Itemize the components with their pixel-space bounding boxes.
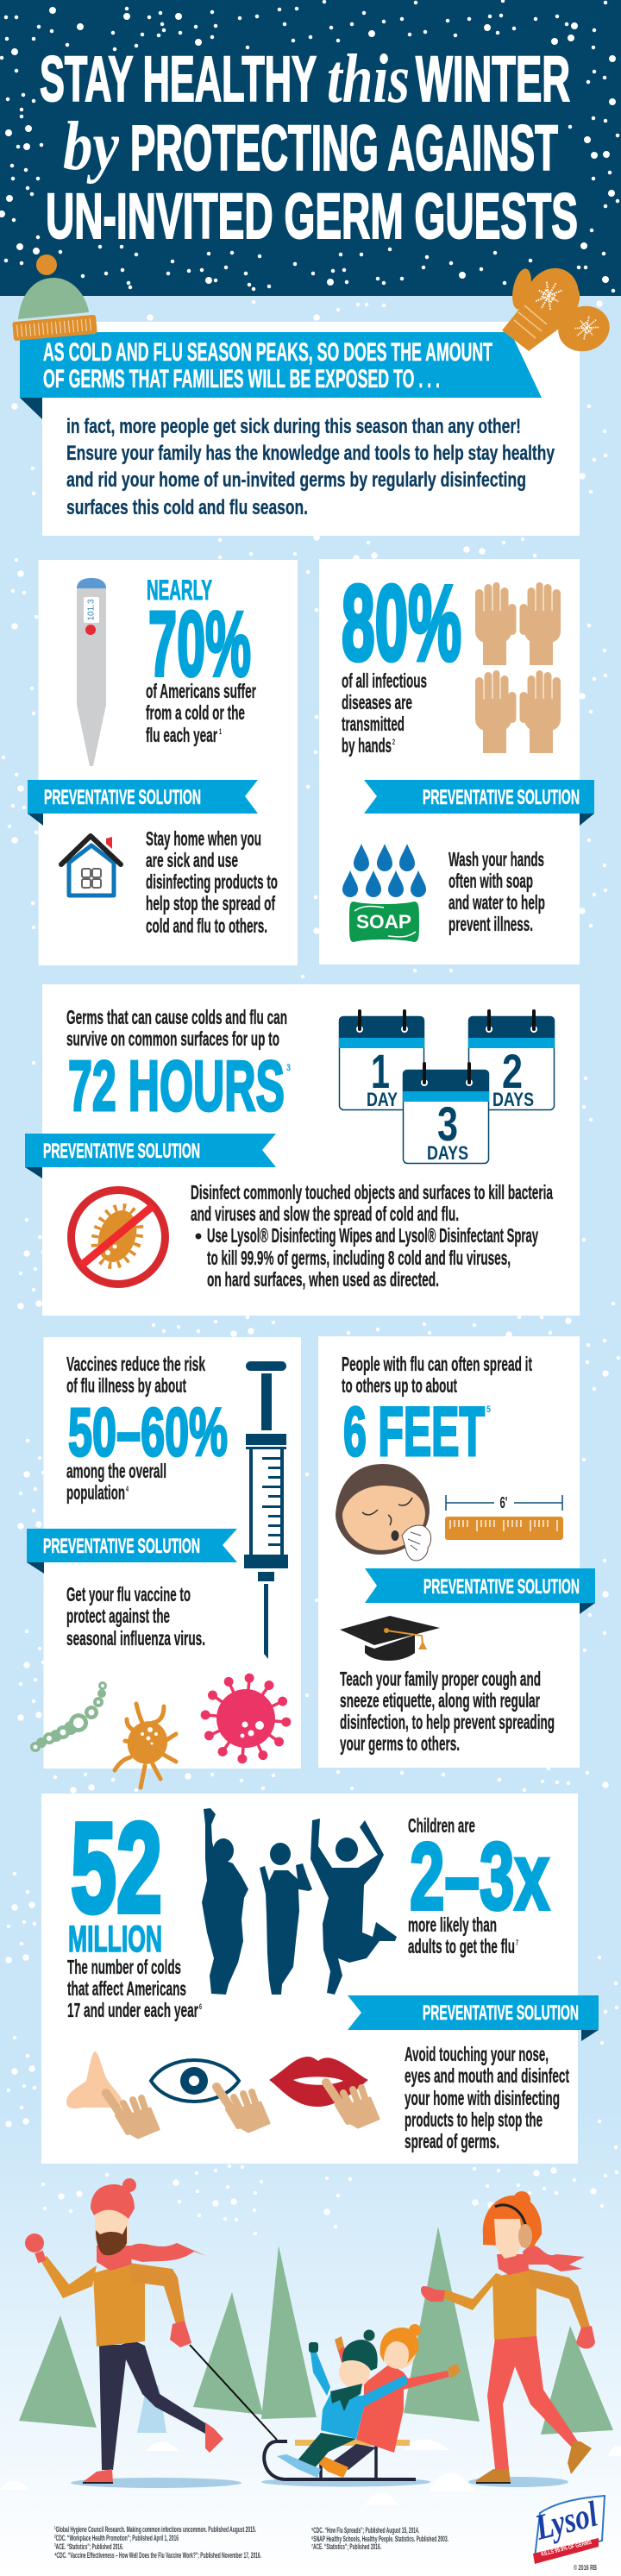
footnotes right: ⁷ACE. “Statistics”; Published 2016. [311,2542,381,2552]
snow on light background [3,302,618,2234]
icon: lips and hand [269,2057,379,2127]
stat: 2-3x [408,1814,549,1957]
footnotes left: ⁴CDC. “Vaccine Effectiveness – How Well Does the Flu Vaccine Work?”; Published November 17, 2016. [54,2551,261,2560]
banner: intro [20,332,542,419]
solution text [191,1181,553,1291]
illustration: sled with children [264,2324,461,2479]
stat: 2-3x: 2–3x [410,1824,549,1930]
icon: pink virus [200,1673,292,1764]
stat: nearly 70 percent: 1 [219,727,222,736]
snow mounds and shadows [0,2440,621,2505]
icon: water drops and soap: SOAP [356,911,411,933]
stat: 80 percent: 2 [392,738,395,746]
icon: six foot ruler [445,1494,563,1540]
solution text: protect against the [66,1605,170,1627]
stat: 2-3x: adults to get the flu [408,1935,515,1957]
icon: house [61,836,121,895]
icon: thermometer: 101.3 [86,599,97,621]
icon: calendar 2 days: DAYS [492,1089,534,1110]
stat: 52 million: 6 [199,2002,202,2011]
icon: calendar 2 days [468,1011,555,1110]
icon: calendar 2 days: 2 [502,1044,523,1098]
stat: 72 hours [66,1006,291,1126]
stat: 2-3x: more likely than [408,1913,497,1936]
icon: eye and hand [151,2060,269,2132]
banner: preventative solution: PREVENTATIVE SOLUTION [43,1140,200,1163]
panel: 6 feet [318,1336,595,1768]
solution text: often with soap [448,870,533,892]
stat: 6 feet [342,1353,532,1471]
footnotes right: ⁵CDC. “How Flu Spreads”; Published August 15, 2014. [311,2526,419,2535]
icon: calendar 1 day [339,1011,424,1110]
footnotes right [311,2526,448,2552]
illustration: woman [421,2191,595,2483]
solution text: seasonal influenza virus. [66,1627,205,1649]
icon: calendar 1 day: 1 [371,1044,390,1098]
icon: sneezing face [336,1464,431,1561]
icon: graduation cap [340,1616,440,1661]
banner: preventative solution [28,780,258,826]
panel: header [0,0,621,296]
illustration: man pulling sled [25,2178,277,2483]
solution text: your germs to others. [340,1732,460,1755]
banner: preventative solution [365,1568,595,1614]
stat: 50-60 percent: population [66,1481,125,1504]
icon: green germ chain [30,1681,107,1752]
panel: vaccines [27,1337,301,1787]
stat: 52 million [67,1797,202,2021]
icon: orange germ [115,1704,176,1787]
icon: six foot ruler: 6' [500,1494,507,1511]
stat: 2-3x: Children are [408,1814,475,1837]
stat: 50-60 percent [66,1353,228,1504]
trees [19,2227,613,2435]
solution text [146,827,278,937]
solution text: are sick and use [146,849,238,871]
panel: 80 percent [319,559,594,964]
stat: 50-60 percent: 4 [126,1485,129,1493]
stat: 52 million: The number of colds [67,1956,181,1978]
stat: 52 million: 17 and under each year [67,1999,198,2021]
stat: 52 million: 52 [71,1797,162,1939]
logo: Lysol: KILLS 99.9% OF GERMS [541,2540,593,2558]
stat: 2-3x: 7 [516,1938,518,1947]
stat: 50-60 percent: 50–60% [68,1393,228,1470]
icon: syringe [244,1361,288,1659]
intro text [66,415,555,519]
icon: calendar 3 days [403,1064,489,1164]
stat: 72 hours: 3 [286,1063,291,1073]
icon: nose and hand [66,2051,159,2138]
panel: children [41,1794,599,2164]
stat: 50-60 percent: among the overall [66,1460,166,1482]
solution text: spread of germs. [405,2130,499,2152]
icon: hands [475,582,561,753]
snow on header [2,1,618,291]
intro text: surfaces this cold and flu season. [66,496,308,519]
stat: nearly 70 percent [146,575,256,746]
silhouettes: jumping children [202,1808,397,1995]
panel: 72 hours [25,984,580,1316]
stat: 50-60 percent: of flu illness by about [66,1374,186,1397]
solution text [340,1668,555,1755]
solution text [405,2043,569,2152]
icon: mittens [502,260,615,357]
icon: thermometer [77,578,106,766]
icon: calendar 3 days: DAYS [427,1142,468,1164]
solution text: on hard surfaces, when used as directed. [207,1268,439,1291]
banner: preventative solution [364,780,594,826]
stat: 80 percent: 80% [342,564,461,683]
stat: 6 feet: to others up to about [342,1374,457,1397]
footnotes left: ¹Global Hygiene Council Research. Making common infections uncommon. Published August 2015. [54,2525,256,2535]
solution text: cold and flu to others. [146,914,267,937]
stat: 80 percent [342,564,461,757]
stat: 80 percent: by hands [342,734,392,757]
stat: 50-60 percent: Vaccines reduce the risk [66,1353,205,1375]
footnotes right: ⁶SNAP Healthy Schools, Healthy People. Statistics. Published 2003. [311,2535,448,2544]
banner: preventative solution [27,1529,237,1574]
stat: 6 feet: 6 FEET [343,1393,485,1471]
title: by [63,109,119,185]
panel: 70 percent [28,560,298,965]
title [40,41,578,252]
stat: 80 percent: of all infectious [342,669,427,692]
icon: winter hat [12,254,97,341]
stat: nearly 70 percent: flu each year [146,724,217,746]
stat: 80 percent: diseases are [342,691,412,713]
logo: Lysol [531,2495,605,2564]
stat: nearly 70 percent: 70% [148,592,251,695]
banner: preventative solution [348,1995,599,2041]
stat: 52 million: MILLION [68,1919,162,1960]
icon: no germs [71,1191,166,1284]
copyright: © 2016 RB [574,2563,597,2572]
stat: nearly 70 percent: from a cold or the [146,701,245,724]
solution text: Wash your hands [448,848,544,870]
stat: 72 hours: survive on common surfaces for up to [66,1027,279,1050]
panel: intro [20,322,580,536]
footnotes left: ²CDC. “Workplace Health Promotion”; Published April 1, 2016 [54,2534,179,2543]
stat: nearly 70 percent: of Americans suffer [146,680,256,702]
solution text [448,848,545,935]
stat: 72 hours: Germs that can cause colds and flu can [66,1006,287,1028]
stat: 52 million: that affect Americans [67,1977,186,2000]
title: STAY HEALTHY [40,43,317,115]
solution text: Get your flu vaccine to [66,1583,191,1605]
footnotes left [54,2525,261,2560]
footnotes left: ³ACE. “Statistics”; Published 2016. [54,2542,123,2552]
stat: 72 hours: 72 HOURS [68,1046,285,1126]
stat: 6 feet: 5 [486,1404,491,1415]
stat: nearly 70 percent: NEARLY [147,575,212,606]
solution text: help stop the spread of [146,892,275,914]
banner: preventative solution: PREVENTATIVE SOLUTION [43,1535,200,1558]
icon: calendar 1 day: DAY [367,1089,398,1110]
solution text: and water to help [448,891,545,914]
banner: preventative solution: PREVENTATIVE SOLUTION [44,786,201,809]
solution text: prevent illness. [448,913,533,935]
solution text: disinfecting products to [146,870,278,893]
stat: 80 percent: transmitted [342,713,405,735]
solution text [66,1583,205,1649]
icon: calendar 3 days: 3 [437,1096,458,1151]
logo: Lysol: Lysol [531,2495,602,2548]
banner: preventative solution [25,1134,276,1178]
title: this [327,41,410,117]
icon: water drops and soap [342,844,426,942]
solution text: Stay home when you [146,827,261,850]
